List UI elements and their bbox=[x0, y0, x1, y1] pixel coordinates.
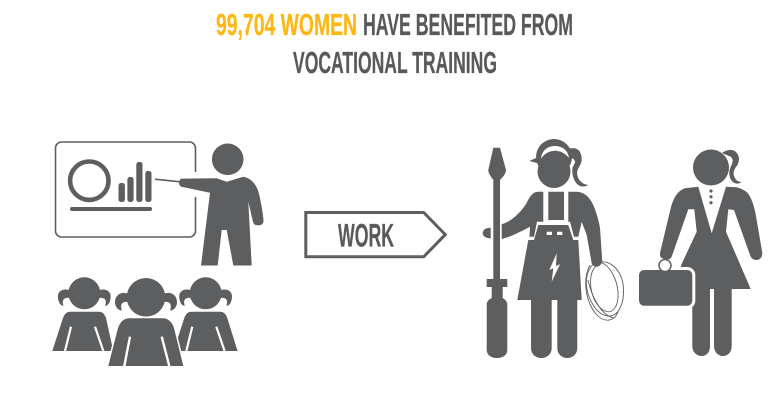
head and ponytail bbox=[693, 150, 742, 186]
briefcase bbox=[639, 260, 692, 306]
right arm and torso bbox=[568, 192, 602, 267]
buttons bbox=[709, 189, 713, 193]
title: HAVE BENEFITED FROM bbox=[363, 8, 573, 42]
icon: cable coil bbox=[586, 262, 624, 320]
icon: electrician woman bbox=[483, 139, 602, 358]
icon: group of three girls bbox=[52, 277, 238, 366]
icon: left girl bbox=[52, 277, 113, 351]
arrow: work: WORK bbox=[338, 218, 394, 254]
apron with pockets and bolt bbox=[517, 225, 582, 300]
icon: businesswoman bbox=[639, 150, 762, 356]
arm and hand holding screwdriver bbox=[483, 228, 491, 238]
hard hat and head bbox=[529, 139, 588, 188]
title: 99,704 WOMEN bbox=[216, 8, 357, 42]
bib bbox=[548, 192, 564, 220]
icon: presentation board bbox=[56, 142, 196, 237]
icon: right girl bbox=[174, 277, 238, 351]
jacket and skirt bbox=[660, 187, 762, 289]
legs bbox=[692, 288, 710, 356]
icon: presenter bbox=[155, 144, 264, 266]
icon: centre girl bbox=[108, 278, 183, 366]
legs bbox=[531, 299, 552, 358]
icon: screwdriver bbox=[487, 148, 507, 358]
arrow: work bbox=[306, 212, 445, 257]
title: VOCATIONAL TRAINING bbox=[293, 46, 497, 80]
title bbox=[216, 8, 573, 80]
